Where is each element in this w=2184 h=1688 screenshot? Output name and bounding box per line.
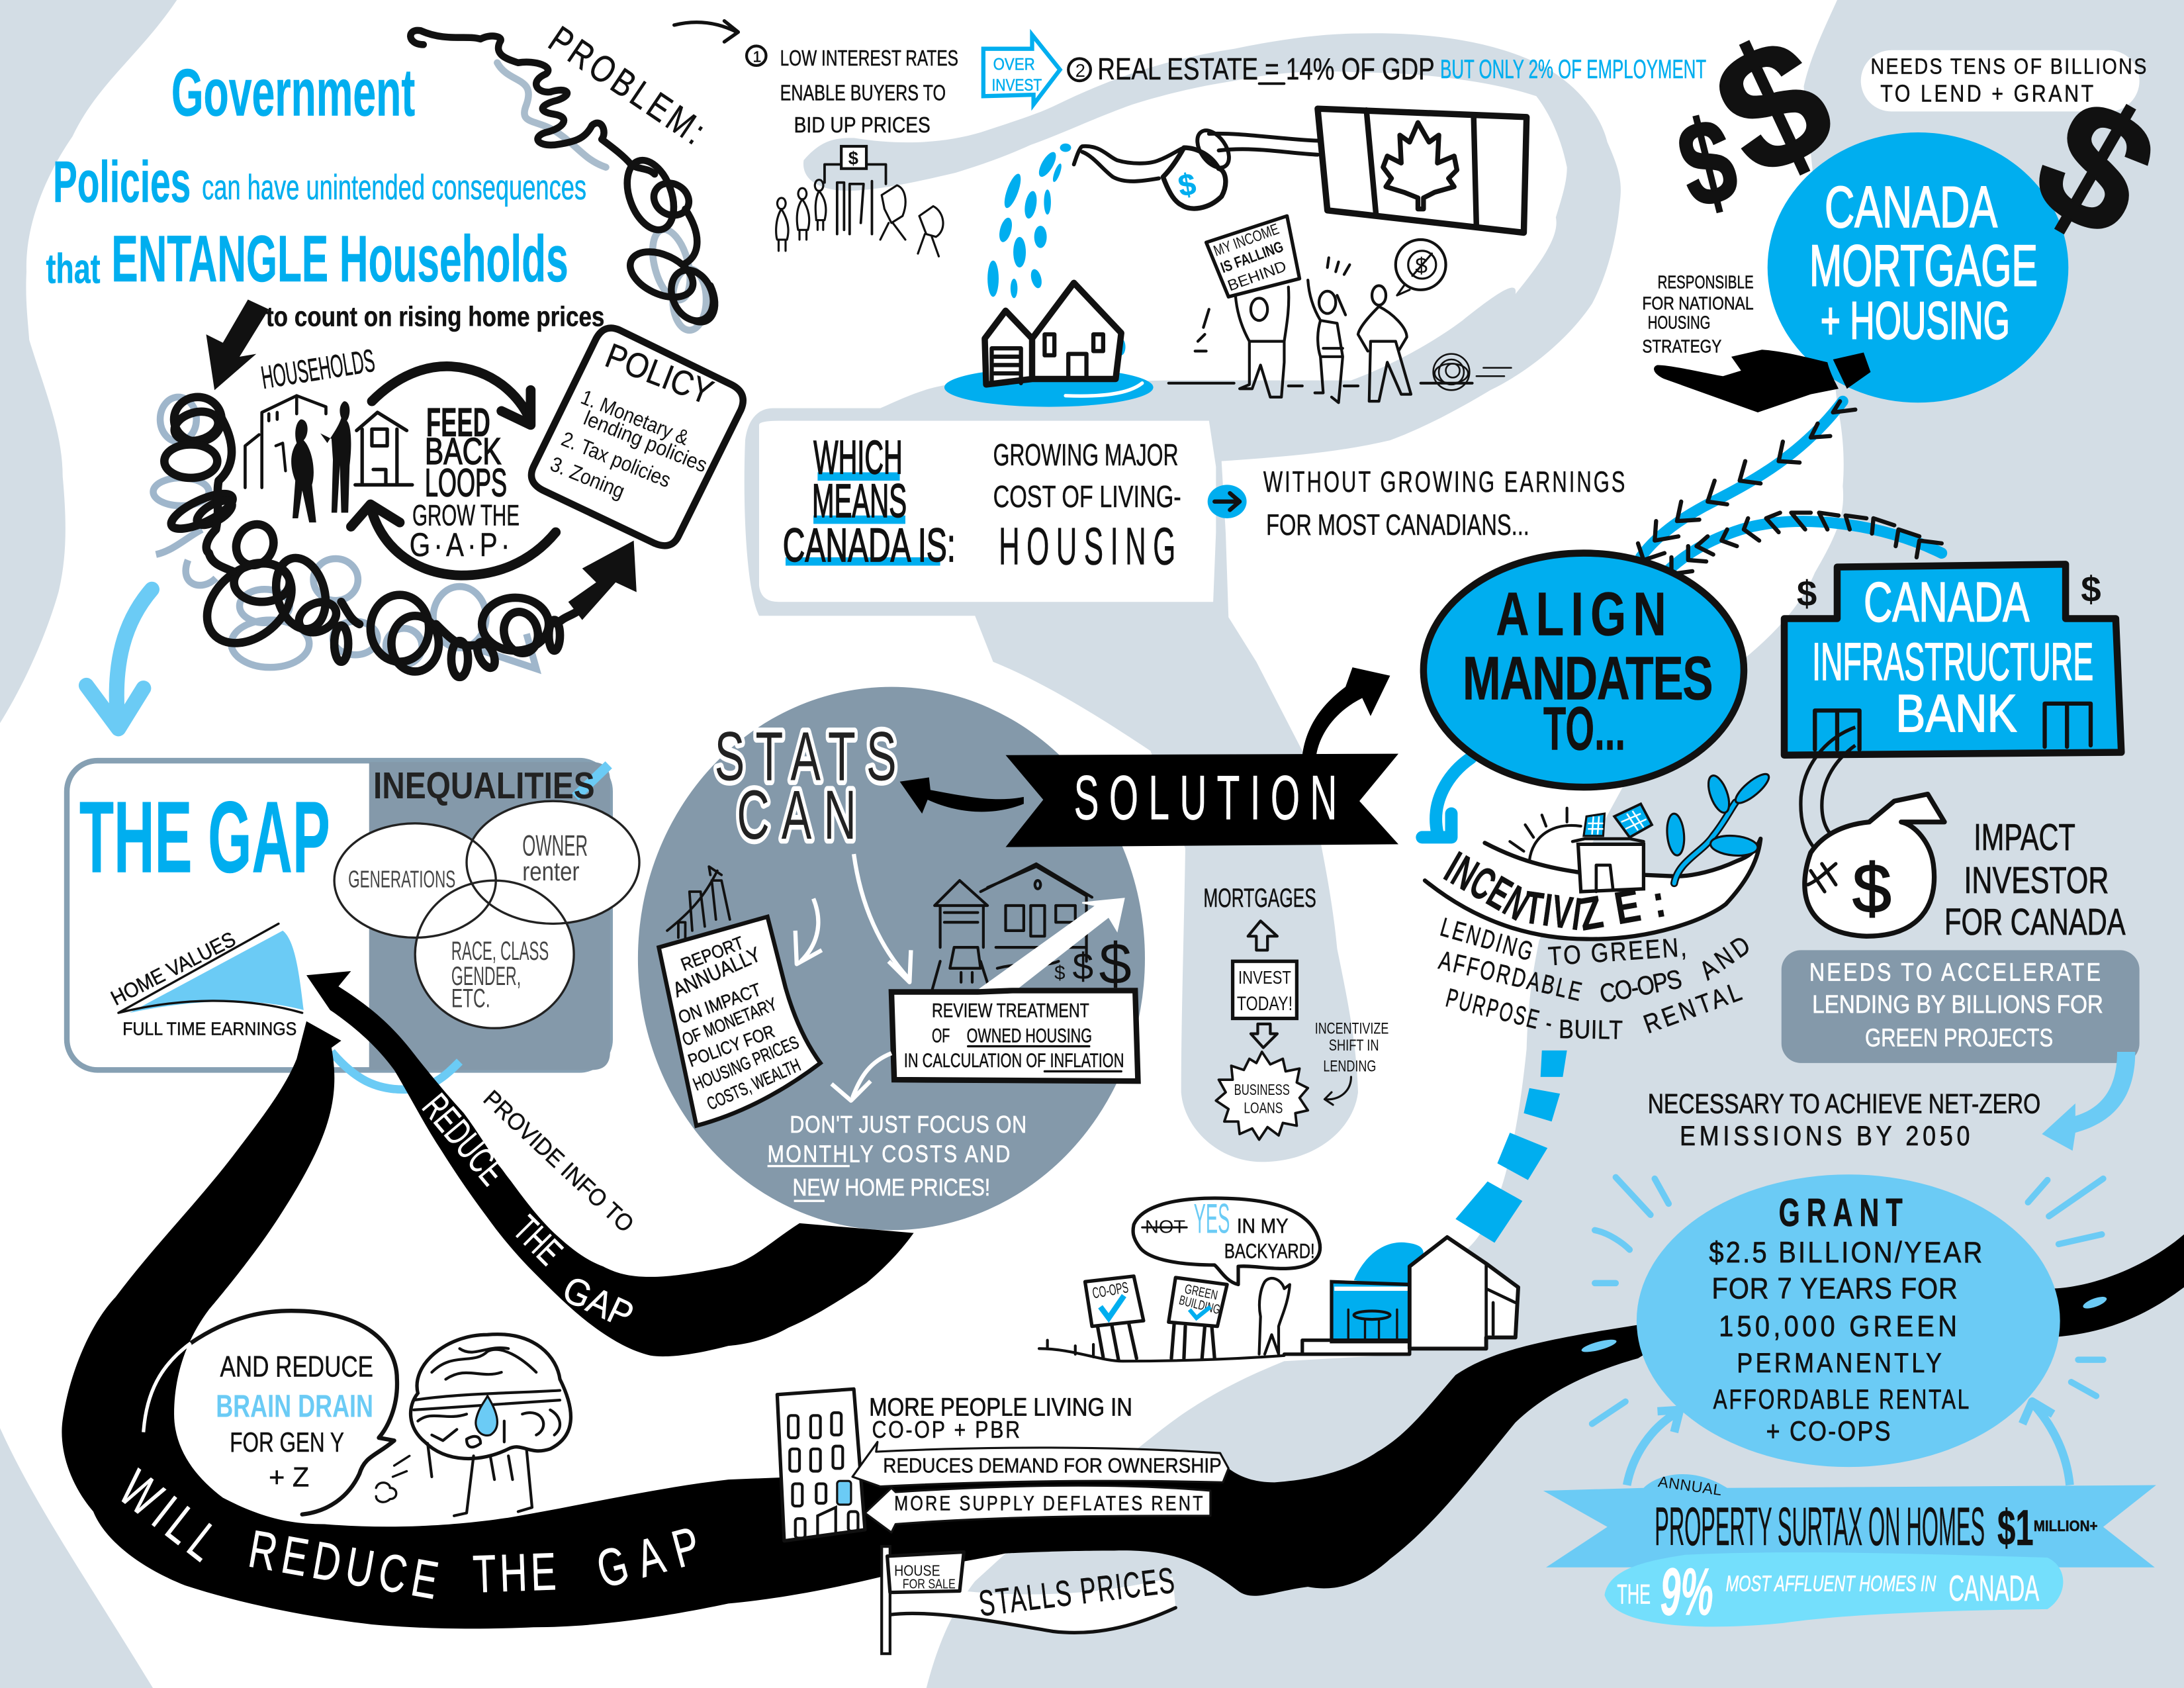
icon: black dollar signs — [1666, 0, 2184, 275]
panel: review treatment box: REVIEW TREATMENT — [932, 1000, 1089, 1021]
arrow: solution to align — [1302, 667, 1390, 755]
text: responsible for national housing strategy — [1642, 272, 1754, 356]
panel: grant ellipse: GRANT — [1779, 1191, 1903, 1235]
venn diagram: inequalities: ETC. — [451, 984, 490, 1013]
arrow: long to review box — [854, 854, 911, 982]
panel: grant ellipse: FOR 7 YEARS FOR — [1712, 1272, 1958, 1305]
panel: canada infrastructure bank: CANADA — [1864, 571, 2029, 633]
banner: property surtax — [1543, 1473, 2156, 1568]
text: without growing earnings: WITHOUT GROWING EARNINGS — [1263, 466, 1625, 498]
road: will reduce the gap: THE — [472, 1542, 557, 1604]
text: lending to green: AFFORDABLE — [1436, 945, 1584, 1007]
arrow: white rising over house — [978, 899, 1124, 992]
text: net-zero emissions: EMISSIONS BY 2050 — [1680, 1121, 1970, 1152]
scribble: problem tangle — [410, 30, 721, 330]
banner: property surtax: MILLION+ — [2034, 1517, 2098, 1534]
icon: protesters with sign: BEHIND — [1225, 257, 1289, 295]
flow: invest today to business loans — [1216, 921, 1308, 1140]
heading: which means canada is: WHICH — [813, 432, 903, 485]
callout: yes in my backyard: YES — [1194, 1196, 1230, 1243]
callout: needs tens of billions — [1861, 50, 2146, 111]
arrow: more supply deflates rent — [865, 1485, 1210, 1532]
road: will reduce the gap — [62, 1021, 2184, 1628]
text: net-zero emissions — [1648, 1088, 2040, 1152]
callout: nine percent most affluent homes — [1604, 1552, 2063, 1629]
text: growing major cost of living — [993, 438, 1181, 576]
text: incentivize shift in lending — [1315, 1020, 1388, 1105]
text: mortgages: MORTGAGES — [1203, 884, 1316, 913]
callout: needs tens of billions: NEEDS TENS OF BILLIONS — [1870, 54, 2146, 79]
text: lending to green: PURPOSE - — [1443, 983, 1555, 1038]
icon: protesters with sign: $ — [1415, 254, 1428, 279]
banner: solution — [1006, 754, 1398, 847]
text: feedback loops grow the gap: FEED — [426, 400, 490, 445]
text: lending to green: BUILT — [1559, 1013, 1623, 1045]
heading: incentivize: TIVI — [1521, 882, 1584, 941]
icon: money bag watering can — [1074, 125, 1318, 209]
text: feedback loops grow the gap: GROW THE — [412, 499, 520, 532]
panel: needs to accelerate lending: GREEN PROJECTS — [1865, 1025, 2053, 1053]
panel: report paper: POLICY FOR — [685, 1021, 777, 1071]
venn diagram: inequalities: RACE, CLASS — [451, 937, 549, 966]
callout: yes in my backyard: NOT — [1145, 1217, 1185, 1237]
road: reduce the gap from stats can — [306, 971, 914, 1356]
text: growing major cost of living: COST OF LIVING- — [993, 479, 1181, 514]
text: to count on rising home prices: to count on rising home prices — [266, 301, 604, 332]
text: real estate share: BUT ONLY 2% OF EMPLOYMENT — [1440, 55, 1706, 84]
icon: house for sale flag: STALLS PRICES — [977, 1560, 1177, 1624]
panel: grant ellipse — [1637, 1174, 2060, 1467]
text: lending to green: AND — [1694, 929, 1756, 986]
venn diagram: inequalities: renter — [522, 857, 580, 886]
arrow: reduces demand for ownership — [852, 1442, 1228, 1487]
text: low interest rates: 1 — [753, 48, 761, 66]
arrow: tangle to policy — [569, 541, 637, 620]
arrow: align to incentivize — [1422, 758, 1471, 837]
panel: policy card: 3. Zoning — [547, 451, 628, 503]
flow: invest today to business loans: BUSINESS — [1234, 1081, 1290, 1098]
road: reduce the gap from stats can: REDUCE — [414, 1086, 513, 1193]
text: incentivize shift in lending: SHIFT IN — [1329, 1037, 1379, 1055]
dashed path: incentivize to house — [1455, 1051, 1567, 1243]
venn diagram: inequalities: GENERATIONS — [348, 867, 455, 893]
icon: green house and plant — [1510, 770, 1773, 892]
arrow: curved to report — [796, 899, 822, 964]
panel: policy card: POLICY — [600, 336, 718, 412]
icon: households sketch — [245, 396, 412, 522]
heading: which means canada is: MEANS — [812, 475, 907, 528]
panel: which means box — [759, 421, 1216, 602]
panel: canada mortgage and housing circle: MORTGAGE — [1809, 232, 2038, 298]
arc: light blue under the gap — [332, 1052, 460, 1090]
panel: grant ellipse: 150,000 GREEN — [1719, 1309, 1957, 1342]
panel: report paper: COSTS, WEALTH — [704, 1055, 803, 1114]
panel: canada mortgage and housing circle — [1768, 132, 2068, 402]
panel: report paper: ON IMPACT — [676, 979, 764, 1028]
arrow: light blue down to the gap — [86, 589, 152, 729]
road: will reduce the gap: REDUCE — [245, 1519, 443, 1611]
text: lending to green: TO GREEN, — [1547, 931, 1688, 971]
icon: house for sale flag: FOR SALE — [903, 1577, 956, 1591]
text: impact investor for canada — [1944, 817, 2126, 943]
callout: brain drain speech bubble: FOR GEN Y — [230, 1427, 344, 1458]
icon: black hand — [1654, 350, 1870, 412]
callout: needs tens of billions: TO LEND + GRANT — [1880, 81, 2093, 107]
callout: nine percent most affluent homes: THE — [1617, 1578, 1651, 1609]
heading: incentivize: INCEN — [1436, 842, 1538, 931]
text: more people living in co-op: CO-OP + PBR — [872, 1417, 1020, 1444]
text: lending to green: RENTAL — [1639, 976, 1745, 1039]
panel: review treatment box: OF — [932, 1025, 950, 1047]
icon: black dollar signs: $ — [2005, 59, 2184, 275]
callout: brain drain speech bubble: + Z — [269, 1462, 309, 1493]
banner: property surtax: $1 — [1997, 1500, 2034, 1556]
panel: align mandates ellipse — [1424, 553, 1744, 787]
text: monthly costs note: DON'T JUST FOCUS ON — [790, 1112, 1026, 1139]
text: low interest rates: ENABLE BUYERS TO — [780, 81, 946, 106]
heading: incentivize — [1436, 842, 1670, 941]
icon: protesters with sign — [1169, 216, 1511, 402]
panel: align mandates ellipse: TO... — [1543, 694, 1625, 763]
icon: dollar signs: $ — [1073, 947, 1093, 988]
text: feedback loops grow the gap: BACK — [425, 431, 502, 473]
text: more people living in co-op: MORE PEOPLE LIVING IN — [869, 1393, 1132, 1421]
arrow: reduces demand for ownership: REDUCES DEMAND FOR OWNERSHIP — [883, 1454, 1222, 1477]
chart: home values versus earnings — [107, 923, 304, 1039]
title: government policies: that — [46, 246, 101, 292]
callout: brain drain speech bubble: AND REDUCE — [220, 1350, 373, 1383]
text: monthly costs note: NEW HOME PRICES! — [793, 1175, 990, 1201]
icon: apartment building — [777, 1389, 865, 1541]
icon: co-op and green building signs: GREEN — [1183, 1282, 1219, 1303]
text: growing major cost of living: HOUSING — [999, 517, 1175, 576]
icon: protesters with sign: MY INCOME — [1211, 220, 1281, 259]
panel: canada mortgage and housing circle: + HOUSING — [1821, 291, 2010, 350]
heading: the gap: THE GAP — [79, 780, 330, 894]
callout: brain drain speech bubble: BRAIN DRAIN — [216, 1388, 373, 1424]
panel: report paper: HOUSING PRICES — [690, 1031, 802, 1094]
banner: property surtax: ANNUAL — [1657, 1473, 1723, 1499]
text: incentivize shift in lending: INCENTIVIZE — [1315, 1020, 1388, 1038]
panel: canada infrastructure bank — [1784, 564, 2121, 755]
arrow: chevron chain from mortgage to align — [1638, 401, 1855, 560]
panel: align mandates ellipse: ALIGN — [1496, 581, 1666, 649]
icon: flooded house — [944, 283, 1154, 407]
road: reduce the gap from stats can: GAP — [557, 1268, 639, 1337]
heading: which means canada is — [783, 432, 956, 572]
panel: policy card — [531, 328, 743, 545]
text: responsible for national housing strategy: FOR NATIONAL — [1642, 293, 1754, 313]
icon: co-op and green building signs: CO-OPS — [1091, 1278, 1130, 1301]
panel: incentivize bowl — [1425, 770, 1773, 941]
callout: nine percent most affluent homes: 9% — [1661, 1555, 1713, 1629]
text: real estate share: 2 — [1075, 60, 1085, 81]
text: responsible for national housing strategy: HOUSING — [1648, 312, 1710, 333]
panel: policy card: 2. Tax policies — [558, 427, 674, 492]
arrow: over invest: OVER — [993, 55, 1035, 73]
icon: dollar signs: $ — [1099, 931, 1132, 996]
text: more people living in co-op — [869, 1393, 1132, 1444]
panel: canada infrastructure bank: $ — [1797, 573, 1817, 614]
arrow: down to households — [206, 300, 269, 390]
small arrow toward point one — [674, 21, 738, 42]
text: incentivize shift in lending: LENDING — [1323, 1057, 1376, 1075]
icon: money bag watering can: $ — [1175, 166, 1199, 203]
flow: invest today to business loans: INVEST — [1238, 967, 1291, 988]
flow: invest today to business loans: LOANS — [1244, 1100, 1283, 1117]
heading: stats can: STATS — [715, 718, 897, 795]
panel: canada mortgage and housing circle: CANADA — [1825, 174, 1997, 240]
venn diagram: inequalities — [334, 801, 639, 1028]
panel: canada infrastructure bank: $ — [2081, 569, 2101, 610]
panel: needs to accelerate lending: NEEDS TO ACCELERATE — [1809, 959, 2101, 986]
flow: invest today to business loans: TODAY! — [1237, 993, 1293, 1015]
heading: inequalities: INEQUALITIES — [373, 765, 595, 807]
callout: brain drain speech bubble — [144, 1311, 397, 1515]
icon: dollar signs — [1054, 931, 1132, 996]
callout: yes in my backyard: BACKYARD! — [1224, 1239, 1315, 1262]
text: responsible for national housing strategy: STRATEGY — [1642, 336, 1721, 357]
callout: yes in my backyard: IN MY — [1237, 1214, 1289, 1238]
panel: align mandates ellipse: MANDATES — [1463, 645, 1713, 713]
panel: report paper: OF MONETARY — [679, 994, 780, 1050]
text: low interest rates: LOW INTEREST RATES — [780, 46, 958, 71]
icon: co-op and green building signs: BUILDING — [1177, 1293, 1222, 1317]
arrow: review box to note — [831, 1053, 891, 1101]
road: will reduce the gap: GAP — [591, 1515, 706, 1599]
text: monthly costs note — [768, 1112, 1026, 1201]
arrow: over invest — [983, 35, 1060, 105]
text: provide info to: PROVIDE INFO TO — [478, 1085, 639, 1237]
road: reduce the gap from stats can: THE — [505, 1208, 570, 1273]
text: responsible for national housing strategy: RESPONSIBLE — [1657, 272, 1754, 293]
title: government policies: can have unintended consequences — [202, 168, 586, 207]
panel: review treatment box: OWNED HOUSING — [967, 1025, 1092, 1047]
chart: home values versus earnings: HOME VALUES — [107, 927, 240, 1010]
text: feedback loops grow the gap: LOOPS — [425, 461, 507, 504]
arrow: more supply deflates rent: MORE SUPPLY DEFLATES RENT — [894, 1492, 1203, 1515]
panel: canada infrastructure bank: BANK — [1895, 684, 2017, 743]
heading: stats can — [715, 718, 897, 854]
text: without growing earnings — [1263, 466, 1625, 541]
icon: crying brain — [376, 1335, 570, 1516]
text: impact investor for canada: IMPACT — [1974, 817, 2075, 859]
text: lending to green: LENDING — [1437, 913, 1536, 967]
text: feedback loops grow the gap: G·A·P· — [410, 526, 510, 563]
text: lending to green — [1436, 913, 1756, 1045]
panel: the gap — [67, 761, 639, 1070]
icon: protesters with sign: IS FALLING — [1218, 238, 1285, 276]
problem label: PROBLEM: — [541, 17, 713, 152]
venn diagram: inequalities: GENDER, — [451, 962, 521, 991]
households label: HOUSEHOLDS — [259, 343, 377, 396]
text: impact investor for canada: FOR CANADA — [1944, 902, 2126, 943]
arrow: light blue to net zero — [2042, 1052, 2135, 1150]
text: feedback loops grow the gap — [410, 400, 520, 563]
icon: co-op and green building signs — [1039, 1276, 1290, 1361]
panel: policy card: lending policies — [580, 406, 711, 477]
panel: grant ellipse: + CO-OPS — [1766, 1417, 1890, 1447]
text: net-zero emissions: NECESSARY TO ACHIEVE NET-ZERO — [1648, 1088, 2040, 1119]
panel: report paper: REPORT — [678, 932, 747, 975]
callout: nine percent most affluent homes: CANADA — [1948, 1568, 2039, 1609]
panel: grant ellipse: AFFORDABLE RENTAL — [1713, 1383, 1969, 1415]
callout: nine percent most affluent homes: MOST AFFLUENT HOMES IN — [1726, 1571, 1936, 1596]
road: will reduce the gap: WILL — [109, 1458, 230, 1572]
text: lending to green: CO-OPS — [1597, 963, 1684, 1009]
heading: stats can: CAN — [737, 776, 856, 854]
title: government policies: Policies — [53, 149, 191, 214]
panel: grant ellipse: $2.5 BILLION/YEAR — [1709, 1236, 1982, 1268]
text: real estate share — [1068, 52, 1706, 86]
title: government policies: Government — [171, 56, 415, 130]
panel: report paper — [659, 917, 821, 1126]
icon: dollar signs: $ — [1054, 962, 1066, 984]
text: without growing earnings: FOR MOST CANADIANS... — [1266, 509, 1529, 541]
title: government policies — [46, 56, 586, 295]
icon: bank and buyers: $ — [848, 148, 858, 168]
text: growing major cost of living: GROWING MAJOR — [993, 438, 1178, 472]
banner: solution: SOLUTION — [1074, 762, 1337, 833]
decorative rays: grant — [1592, 1177, 2103, 1424]
text: low interest rates — [747, 46, 958, 138]
arrow: over invest: INVEST — [991, 76, 1042, 95]
icon: black dollar signs: $ — [1666, 93, 1749, 234]
icon: black dollar signs: $ — [1688, 0, 1858, 214]
panel: review treatment box: IN CALCULATION OF INFLATION — [904, 1050, 1124, 1072]
icon: house for sale flag: HOUSE — [894, 1562, 940, 1579]
arrow: solution to stats can — [900, 777, 1024, 814]
text: low interest rates: BID UP PRICES — [794, 113, 931, 138]
panel: needs to accelerate lending — [1782, 950, 2140, 1063]
icon: rising chart — [667, 867, 730, 937]
icon: house and cafe scene — [1284, 1237, 1518, 1354]
text: impact investor for canada: INVESTOR — [1964, 860, 2109, 902]
icon: house and car — [931, 864, 1092, 996]
title: government policies: ENTANGLE Households — [111, 222, 569, 295]
panel: grant ellipse: PERMANENTLY — [1737, 1348, 1942, 1379]
icon: house for sale flag — [882, 1546, 1177, 1654]
arrow: chevron chain from infrastructure bank to align — [1667, 513, 1942, 574]
icon: blue arrow dot — [1208, 485, 1247, 518]
icon: water drops — [987, 144, 1126, 355]
feedback loop arrows — [351, 366, 556, 575]
venn diagram: inequalities: OWNER — [522, 829, 588, 862]
icon: money bag with arm: $ — [1852, 851, 1891, 928]
icon: canadian flag — [1318, 109, 1527, 233]
panel: stats can circle — [638, 687, 1145, 1230]
heading: which means canada is: CANADA IS: — [783, 519, 956, 572]
icon: money bag with arm — [1801, 727, 1944, 936]
chart: home values versus earnings: FULL TIME EARNINGS — [122, 1019, 296, 1039]
panel: review treatment box — [891, 990, 1138, 1081]
text: monthly costs note: MONTHLY COSTS AND — [768, 1141, 1010, 1168]
panel: needs to accelerate lending: LENDING BY BILLIONS FOR — [1812, 991, 2103, 1019]
icon: bank and buyers — [776, 146, 943, 256]
tangle chain around households — [154, 397, 582, 677]
arrows: surtax to grant — [1627, 1401, 2070, 1485]
panel: report paper: ANNUALLY — [669, 942, 764, 1002]
heading: incentivize: ZE: — [1575, 876, 1670, 941]
panel: policy card: 1. Monetary & — [578, 385, 692, 449]
callout: yes in my backyard — [1133, 1196, 1320, 1284]
text: real estate share: REAL ESTATE = 14% OF GDP — [1097, 52, 1435, 86]
